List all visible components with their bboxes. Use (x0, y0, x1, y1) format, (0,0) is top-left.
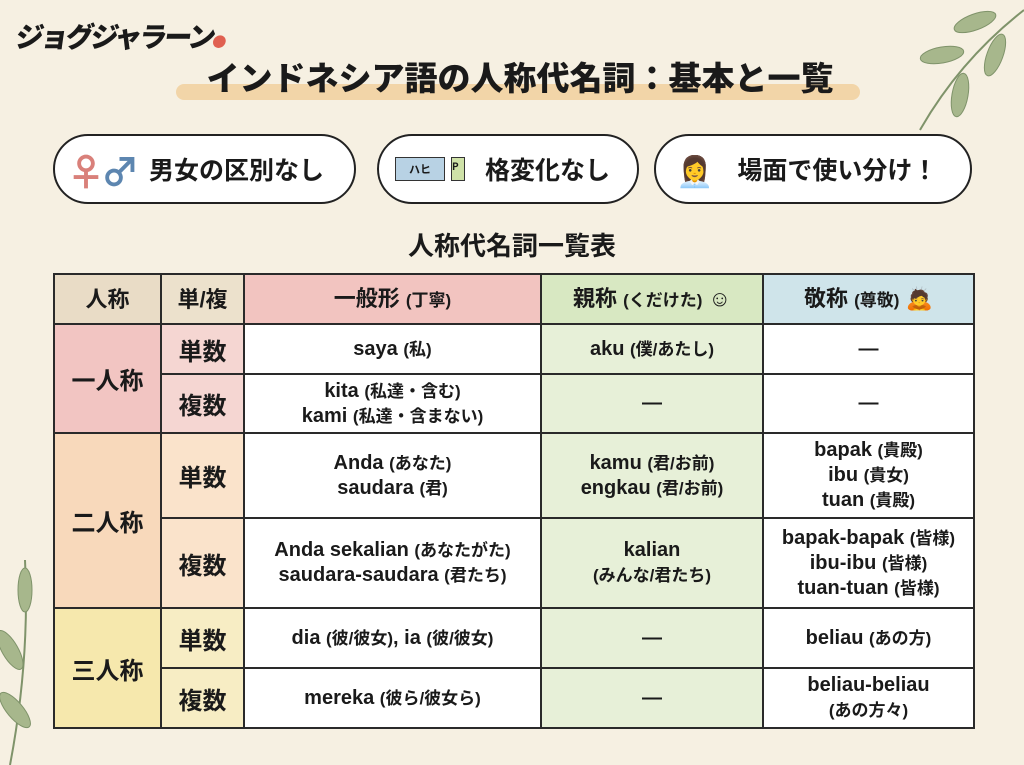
table: beliau-beliau (807, 674, 930, 696)
table: 人称 (85, 286, 130, 312)
table: tuan-tuan (皆様) (798, 576, 939, 598)
table: (あの方々) (829, 701, 908, 720)
leaves: top right (919, 9, 1024, 130)
pill: scene: 👩‍💼 (676, 147, 713, 191)
leaves: bottom left (0, 560, 32, 765)
title: インドネシア語の人称代名詞：基本と一覧 (206, 52, 834, 100)
table: — (642, 392, 662, 414)
table: 単数 (178, 332, 226, 366)
pill: case: ハヒ (409, 161, 431, 177)
table heading: 人称代名詞一覧表 (408, 226, 616, 263)
table: aku (僕/あたし) (590, 338, 714, 360)
table: — (858, 338, 878, 360)
table: mereka (彼ら/彼女ら) (304, 686, 481, 708)
table: kamu (君/お前) (590, 452, 714, 474)
table: ibu (貴女) (828, 464, 909, 486)
table: — (642, 626, 662, 648)
table: (みんな/君たち) (593, 566, 711, 585)
table: 複数 (178, 386, 226, 421)
table: 複数 (178, 546, 226, 580)
table: beliau (あの方) (806, 626, 931, 648)
table: kalian (624, 539, 680, 561)
pill: gender: ♀ (67, 142, 105, 196)
pill: gender (53, 134, 356, 204)
table: kita (私達・含む) (324, 380, 461, 402)
table: saya (私) (353, 338, 432, 360)
table: saudara-saudara (君たち) (279, 564, 506, 586)
table: 単数 (178, 458, 226, 493)
table: 二人称 (72, 503, 144, 538)
table: — (858, 392, 878, 414)
table: 複数 (178, 680, 226, 716)
pill: scene: 場面で使い分け！ (737, 151, 937, 187)
table: 敬称 (尊敬) 🙇 (804, 286, 933, 310)
table (53, 273, 975, 729)
table: 単/複 (177, 286, 228, 312)
pill: case: P (452, 158, 459, 173)
table: — (642, 686, 662, 708)
table: engkau (君/お前) (581, 476, 723, 498)
table: Anda sekalian (あなたがた) (274, 539, 511, 561)
logo: ジョグジャラーン● (13, 16, 225, 56)
pill: gender: ♂ (101, 142, 139, 196)
table: bapak (貴殿) (814, 439, 923, 461)
table: Anda (あなた) (334, 452, 451, 474)
table: saudara (君) (337, 476, 448, 498)
table: 一人称 (72, 361, 144, 396)
pill: case: 格変化なし (485, 151, 610, 187)
pill: gender: 男女の区別なし (149, 151, 324, 187)
table: 単数 (178, 620, 226, 656)
table: bapak-bapak (皆様) (782, 526, 955, 548)
table: 三人称 (72, 650, 144, 686)
pill: case (377, 134, 639, 204)
table: 一般形 (丁寧) (334, 286, 451, 310)
pill: scene (654, 134, 972, 204)
table: tuan (貴殿) (822, 489, 915, 511)
table: dia (彼/彼女), ia (彼/彼女) (292, 626, 493, 648)
table: ibu-ibu (皆様) (810, 552, 927, 574)
table: 親称 (くだけた) ☺ (573, 286, 731, 310)
table: kami (私達・含まない) (302, 404, 483, 426)
